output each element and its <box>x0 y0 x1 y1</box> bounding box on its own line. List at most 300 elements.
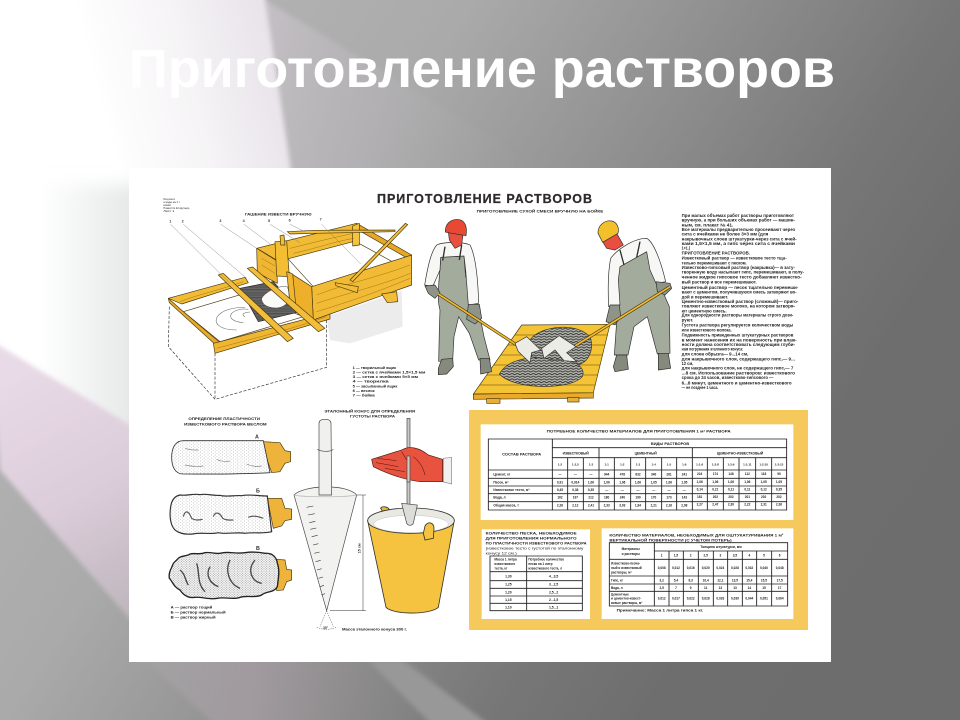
right column explanatory text: нам погружения эталонного конуса: <box>682 347 744 352</box>
right column explanatory text: руют. <box>682 317 693 322</box>
right column explanatory text: срока до 24 часов, известково-гипсового — <box>682 375 774 380</box>
cement row: — <box>558 472 562 476</box>
shovel one <box>438 294 541 363</box>
water row: 197 <box>573 496 578 500</box>
values: 1,25 <box>505 583 512 587</box>
lower trough frame <box>168 277 330 353</box>
legend <box>353 366 426 398</box>
row labels: Известково-песча- <box>611 561 640 565</box>
top-centre illustration: mixing dry mix on board <box>425 210 672 403</box>
right column explanatory text: ПРИГОТОВЛЕНИЕ РАСТВОРОВ. <box>682 251 750 256</box>
table grid <box>609 543 788 606</box>
ratios row: 1:5 <box>667 462 671 466</box>
small note: Плакат № 42 вручную <box>163 206 189 210</box>
bucket <box>368 507 454 613</box>
lime lump <box>262 286 289 308</box>
ratios row: 1:2 <box>620 462 625 466</box>
sand row: 1,06 <box>604 480 610 484</box>
mortars row: 0,028 <box>731 566 739 570</box>
row labels: ковые растворы, м³ <box>611 601 642 605</box>
sand row: 0,914 <box>571 480 580 484</box>
sand row: 1,06 <box>635 480 641 484</box>
water row: 13 <box>719 586 722 590</box>
lime paste row: 0,12 <box>761 488 767 492</box>
lime paste row <box>557 488 782 492</box>
sub-heading: ГАШЕНИЕ ИЗВЕСТИ ВРУЧНУЮ <box>245 212 312 216</box>
ratios row: 1:3 <box>636 462 640 466</box>
lime paste row: 0,14 <box>697 488 703 492</box>
mesh <box>240 282 300 322</box>
cement row: 224 <box>697 472 703 476</box>
sand row: 1,05 <box>776 480 782 484</box>
row labels: и растворы <box>622 552 640 556</box>
thickness values: 6 <box>779 554 781 558</box>
table headers: ИЗВЕСТКОВЫЙ <box>563 452 589 456</box>
right column explanatory text: ченное жидкое гипсовое тесто добавляют известко- <box>682 274 802 279</box>
thickness values: 2 <box>690 554 692 558</box>
mortars row: 0,048 <box>776 566 784 570</box>
bottom-left illustrations <box>169 410 454 631</box>
cement mortars row: 0,064 <box>776 597 784 601</box>
mortars row: 0,024 <box>716 566 725 570</box>
leader numbers: 7 <box>320 218 322 222</box>
water row: 201 <box>745 495 750 499</box>
sand row: 1,05 <box>651 480 657 484</box>
lime paste row: 0,38 <box>572 488 579 492</box>
cement row: 241 <box>682 472 687 476</box>
sand row: 1,06 <box>697 480 703 484</box>
right column explanatory text: Известково-гипсовый раствор (накрывка)— в зату- <box>682 265 796 270</box>
right column explanatory text: — не позднее 1 часа. <box>682 385 718 390</box>
right column explanatory text: Густота раствора регулируется количеством воды <box>682 323 794 328</box>
cone heading: ГУСТОТЫ РАСТВОРА <box>350 415 396 419</box>
total mass row: 2,16 <box>666 504 672 508</box>
paddle В: В <box>256 546 260 552</box>
total mass row: 2,08 <box>681 504 688 508</box>
paddle legend: Б — раствор нормальный <box>171 611 226 615</box>
water row: 202 <box>776 495 782 499</box>
sub-heading: ПРИГОТОВЛЕНИЕ СУХОЙ СМЕСИ ВРУЧНУЮ НА БОЙКЕ <box>477 210 604 214</box>
cone heading: ЭТАЛОННЫЙ КОНУС ДЛЯ ОПРЕДЕЛЕНИЯ <box>324 410 416 414</box>
table title: конусу 12 см.) <box>486 551 517 555</box>
cement row: 118 <box>761 472 766 476</box>
table grid <box>490 556 582 611</box>
plasticity heading: ИЗВЕСТКОВОГО РАСТВОРА ВЕСЛОМ <box>184 422 267 426</box>
right column explanatory text: товляют известковое молоко, на котором затворя- <box>682 304 796 309</box>
paddle Б <box>170 488 292 534</box>
gypsum row: 12,1 <box>717 578 724 582</box>
legend: 5 — засыпанный ящик <box>353 384 398 388</box>
lime paste row: — <box>605 488 609 492</box>
shadow beneath box <box>327 291 403 343</box>
right column explanatory text: Все материалы предварительно просеивают через <box>682 227 795 232</box>
right column explanatory text: для накрывочного слоя, содержащего гипс,— 9... <box>682 356 795 361</box>
water row: 202 <box>713 495 718 499</box>
right column explanatory text: ками 1,5×1,5 мм, а гипс через сита с ячейками <box>682 241 795 246</box>
column headers <box>494 558 564 570</box>
values: 3...2,5 <box>549 583 558 587</box>
gypsum row: 15,5 <box>761 578 767 582</box>
legend: 2 — сетка с ячейками 1,5×1,5 мм <box>353 370 426 374</box>
gypsum row: 15,4 <box>746 578 753 582</box>
values: 1,30 <box>505 574 512 578</box>
total mass row: 2,21 <box>651 504 657 508</box>
paddle Б: Б <box>256 488 260 494</box>
cement row <box>558 472 781 476</box>
table 1: material quantities <box>481 424 793 520</box>
water row: 14 <box>748 586 751 590</box>
sand row <box>557 480 782 484</box>
table headers: ЦЕМЕНТНО-ИЗВЕСТКОВЫЙ <box>717 452 764 456</box>
ratios row: 1:1:6 <box>696 462 703 466</box>
right column explanatory text: 6...8 минут, цементного и цементно-известкового <box>682 380 792 385</box>
cone heading <box>324 410 416 419</box>
ratios row <box>558 462 784 466</box>
table 3: plastering materials <box>602 528 793 619</box>
cement row: 632 <box>635 472 641 476</box>
lime paste row: — <box>621 488 625 492</box>
lime paste row: — <box>683 488 687 492</box>
water row: 2,5 <box>659 586 664 590</box>
values: 1,15 <box>505 598 512 602</box>
mixing board <box>473 324 610 403</box>
right column explanatory text: ности должна соответствовать следующим глуби- <box>682 342 796 347</box>
water row: 202 <box>761 495 767 499</box>
right column explanatory text: вый раствор и все перемешивают. <box>682 280 757 285</box>
right column explanatory text: Подвижность приведенных штукатурных растворов <box>682 333 794 338</box>
right column explanatory text: При малых объемах работ растворы приготовляют <box>682 213 794 218</box>
gypsum row: 3,2 <box>659 578 664 582</box>
row labels: Известковое тесто, м³ <box>493 488 530 492</box>
ratios row: 1:3:9 <box>728 462 735 466</box>
pit dashed outline <box>168 307 327 399</box>
total mass row: 3,03 <box>619 504 626 508</box>
lime paste row: — <box>652 488 656 492</box>
values: 2...1,5 <box>549 598 558 602</box>
cement mortars row: 0,044 <box>745 597 754 601</box>
thickness header: Толщина штукатурки, мм <box>700 545 742 549</box>
right column explanatory text: вают с цементом, получившуюся смесь затворяют во- <box>682 290 797 295</box>
leader numbers <box>169 218 322 224</box>
paddle legend <box>171 606 226 620</box>
total mass row: 2,36 <box>776 503 782 507</box>
right column explanatory text: ным, см. плакат № 41. <box>682 222 733 227</box>
cement mortars row: 0,012 <box>658 597 666 601</box>
row labels: и цементно-извест- <box>611 597 641 601</box>
gypsum row: 17,5 <box>777 578 783 582</box>
cement mortars row: 0,028 <box>702 597 710 601</box>
mortars row: 0,032 <box>745 566 754 570</box>
rod and small cone <box>402 418 417 525</box>
values: 1,20 <box>505 590 512 594</box>
ratios row: 1:6 <box>682 462 687 466</box>
ratios row: 1:1:11 <box>743 462 752 466</box>
poster heading: ПРИГОТОВЛЕНИЕ РАСТВОРОВ <box>377 192 592 206</box>
sand curves <box>216 307 250 330</box>
total mass row: 2,47 <box>712 503 719 507</box>
wood grain <box>180 233 411 348</box>
title: Приготовление растворов <box>129 39 835 99</box>
paddle legend: В — раствор жирный <box>171 616 216 620</box>
right column explanatory text: или известкового молока. <box>682 328 732 333</box>
right column explanatory text: 1×1.) <box>682 246 690 251</box>
cement row: 174 <box>713 472 718 476</box>
legend: 1 — творильный ящик <box>353 366 397 370</box>
paddle A <box>172 434 291 474</box>
ratios row: 1:2:10 <box>759 462 768 466</box>
plasticity heading <box>184 417 267 426</box>
paddle В <box>169 546 292 599</box>
right column explanatory text: 12 см, <box>682 361 693 366</box>
leader numbers: 3 <box>219 219 221 223</box>
lime paste row: 0,45 <box>557 488 563 492</box>
right column explanatory text: ...8 см. Использование растворов: известкового <box>682 370 795 375</box>
thickness values: 2,5 <box>703 554 708 558</box>
worker one, red helmet <box>425 219 492 375</box>
gypsum row: 8,3 <box>688 578 693 582</box>
thickness values: 4 <box>748 554 750 558</box>
legend: 6 — веслок <box>353 389 375 393</box>
shovel two <box>542 287 670 362</box>
leader numbers: 2 <box>182 220 184 224</box>
right column explanatory text: ют цементную смесь. <box>682 308 727 313</box>
small note: Расход извести <box>163 197 175 201</box>
row labels: Цементные <box>611 592 629 596</box>
water row: 212 <box>588 496 594 500</box>
mortars row: 0,012 <box>672 566 680 570</box>
gypsum row: 10,4 <box>703 578 709 582</box>
row labels: растворы, м³ <box>611 571 632 575</box>
cement mortars row <box>658 597 784 601</box>
water row: 15 <box>762 586 766 590</box>
sand row: 1,06 <box>744 480 751 484</box>
water row: 17 <box>778 586 782 590</box>
mortars row: 0,040 <box>760 566 768 570</box>
cement mortars row: 0,033 <box>716 597 725 601</box>
total mass row: 2,30 <box>728 503 734 507</box>
table headers: СОСТАВ РАСТВОРА <box>502 452 541 457</box>
ratios row: 1:2 <box>558 462 562 466</box>
total mass row <box>557 503 782 508</box>
lime paste row: 0,35 <box>588 488 594 492</box>
table title: ВЕРТИКАЛЬНОЙ ПОВЕРХНОСТИ (С УЧЕТОМ ПОТЕРЬ) <box>609 538 733 542</box>
gypsum row <box>659 578 783 582</box>
column headers: Потребное количество <box>528 558 564 562</box>
sand row: 1,06 <box>728 480 734 484</box>
table headers <box>502 441 764 457</box>
ratios row: 1:3 <box>589 462 593 466</box>
water row: 190 <box>635 496 641 500</box>
yellow tables panel <box>469 410 808 630</box>
gypsum row: 5,4 <box>674 578 678 582</box>
values: 4...3,5 <box>549 574 558 578</box>
row labels <box>611 547 642 605</box>
water row: 11 <box>704 586 708 590</box>
lime paste row: — <box>667 488 671 492</box>
red hand <box>372 448 452 484</box>
right column explanatory text: творенную воду насыпают гипс, перемешивают, в полу- <box>682 270 805 275</box>
sand row: 1,06 <box>619 480 626 484</box>
rake <box>335 223 408 303</box>
right column explanatory text: вручную, а при больших объемах работ — машин- <box>682 218 796 223</box>
row labels: Песок, м³ <box>493 480 509 484</box>
total mass row: 2,41 <box>588 504 594 508</box>
sand row: 1,05 <box>761 480 767 484</box>
total mass row: 2,22 <box>744 503 751 507</box>
table title: КОЛИЧЕСТВО МАТЕРИАЛОВ, НЕОБХОДИМЫХ ДЛЯ ОШТУКАТУРИВАНИЯ 1 м² <box>609 533 784 537</box>
cross planks <box>218 267 325 342</box>
water row: 181 <box>697 495 703 499</box>
cement mortars row: 0,022 <box>687 597 695 601</box>
leader lines <box>171 224 361 283</box>
row labels <box>493 473 530 508</box>
lime paste row: 0,11 <box>744 488 751 492</box>
values <box>505 574 558 609</box>
right column explanatory text: Для однородности растворы материалы строго дози- <box>682 313 794 318</box>
cement row: 148 <box>728 472 734 476</box>
right column explanatory text <box>682 213 805 390</box>
water row: 180 <box>604 496 610 500</box>
water row <box>659 586 782 590</box>
ratios row: 1:3:15 <box>775 462 784 466</box>
right column explanatory text: накрывочных слоев штукатурки-через сита с ячей- <box>682 236 797 241</box>
ratios row: 1:2,5 <box>572 462 579 466</box>
total mass row: 1,84 <box>635 504 641 508</box>
table 2: sand quantity <box>482 529 590 619</box>
lime paste row: 0,11 <box>728 488 734 492</box>
sand row: 1,06 <box>712 480 719 484</box>
cement mortars row: 0,039 <box>731 597 739 601</box>
water row: 240 <box>620 496 625 500</box>
values: 2,5...2 <box>549 590 558 594</box>
water row: 9 <box>690 586 692 590</box>
thickness values: 1,5 <box>674 554 678 558</box>
small note: комовой <box>163 203 171 207</box>
row labels: Общая масса, т <box>493 504 519 508</box>
ratios row: 1:1 <box>605 462 609 466</box>
right column explanatory text: дой и перемешивают. <box>682 294 728 299</box>
lime paste row: 0,35 <box>776 488 782 492</box>
sand row: 1,06 <box>588 480 594 484</box>
total mass row: 2,31 <box>761 503 767 507</box>
legend: 3 — сетка с ячейками 5×5 мм <box>353 375 419 379</box>
row labels: Гипс, кг <box>611 578 624 582</box>
column headers: известкового теста, л <box>528 566 562 570</box>
lime paste row: — <box>636 488 640 492</box>
lime paste row: 0,21 <box>712 488 719 492</box>
angle label: 30° <box>323 626 329 630</box>
thickness values: 1 <box>661 554 663 558</box>
thickness values: 5 <box>763 554 765 558</box>
row labels: Вода, л <box>493 496 506 500</box>
cement row: 281 <box>666 472 672 476</box>
total mass row: 2,26 <box>557 504 563 508</box>
cone dimension <box>330 495 366 611</box>
leader numbers: 1 <box>169 220 171 224</box>
table title: КОЛИЧЕСТВО ПЕСКА, НЕОБХОДИМОЕ <box>486 532 577 536</box>
sand row: 1,05 <box>681 480 688 484</box>
mortar pile <box>499 327 592 387</box>
mortars row <box>658 566 784 570</box>
cone height label: 15 см <box>358 543 362 553</box>
leader numbers: 4 <box>243 219 246 223</box>
cement mortars row: 0,051 <box>760 597 768 601</box>
table headers: ЦЕМЕНТНЫЙ <box>635 452 657 456</box>
upper box <box>257 223 412 320</box>
paddle A: А <box>255 434 259 440</box>
water row: 143 <box>682 496 687 500</box>
cement row: — <box>574 472 578 476</box>
legend: 7 — бойка <box>353 394 375 398</box>
ratios row: 1:4 <box>652 462 656 466</box>
paddle legend: А — раствор тощий <box>171 606 212 610</box>
water row: 7 <box>675 586 677 590</box>
cement row: 478 <box>620 472 625 476</box>
top-left illustration: slaking lime by hand <box>163 197 426 399</box>
column headers: известкового <box>494 562 515 566</box>
standard cone <box>293 419 357 629</box>
total mass row: 2,12 <box>572 504 579 508</box>
water row: 162 <box>557 496 563 500</box>
sand row: 1,06 <box>666 480 672 484</box>
right column explanatory text: в момент нанесения их на поверхность при влаж- <box>682 337 797 342</box>
right column explanatory text: Известковый раствор — известковое тесто тща- <box>682 256 787 261</box>
plasticity heading: ОПРЕДЕЛЕНИЕ ПЛАСТИЧНОСТИ <box>188 417 261 421</box>
table title <box>486 532 587 555</box>
row labels: Вода, л <box>611 586 623 590</box>
thickness values: 3 <box>719 554 721 558</box>
table title: ДЛЯ ПРИГОТОВЛЕНИЯ НОРМАЛЬНОГО <box>486 537 577 541</box>
cement row: 944 <box>604 472 610 476</box>
values: 1,5...1 <box>549 605 558 609</box>
thickness values: 3,5 <box>733 554 737 558</box>
small note: Лист 1 <box>163 209 175 213</box>
right column explanatory text: для слоев обрызга— 9...14 см, <box>682 351 748 356</box>
thickness values <box>661 554 781 558</box>
water row: 202 <box>728 495 734 499</box>
right column explanatory text: Цементный раствор — песок тщательно перемеши- <box>682 285 799 290</box>
table headers: ВИДЫ РАСТВОРОВ <box>651 441 689 446</box>
table grid <box>488 439 787 510</box>
right column explanatory text: сита с ячейками не более 3×3 мм (для <box>682 232 769 237</box>
row labels: ный и известковый <box>611 566 642 570</box>
column headers: Масса 1 литра <box>494 558 517 562</box>
cement mortars row: 0,017 <box>672 597 680 601</box>
legend: 4 — творилка <box>353 380 389 384</box>
poster panel <box>129 168 831 662</box>
right column explanatory text: тельно перемешивают с песком. <box>682 260 747 265</box>
mortars row: 0,020 <box>702 566 710 570</box>
right column explanatory text: для накрывочного слоя, не содержащего гипс,— 7 <box>682 366 794 371</box>
cement row: 340 <box>651 472 657 476</box>
total mass row: 2,27 <box>697 503 703 507</box>
column headers: песка на 1 литр <box>528 562 553 566</box>
small note: и воды на 1 т <box>163 200 181 204</box>
table title: (известковое тесто с густотой по эталонному <box>486 547 584 551</box>
water row: 173 <box>666 496 672 500</box>
cement row: 112 <box>745 472 750 476</box>
table title <box>609 533 784 542</box>
mortars row: 0,016 <box>687 566 695 570</box>
gypsum row: 13,5 <box>732 578 738 582</box>
small note <box>163 197 189 213</box>
cement row: 90 <box>777 472 781 476</box>
values: 1,10 <box>505 605 512 609</box>
mortars row: 0,008 <box>658 566 666 570</box>
row labels: Цемент, кг <box>493 473 511 477</box>
cement row: — <box>589 472 593 476</box>
water row <box>557 495 782 500</box>
